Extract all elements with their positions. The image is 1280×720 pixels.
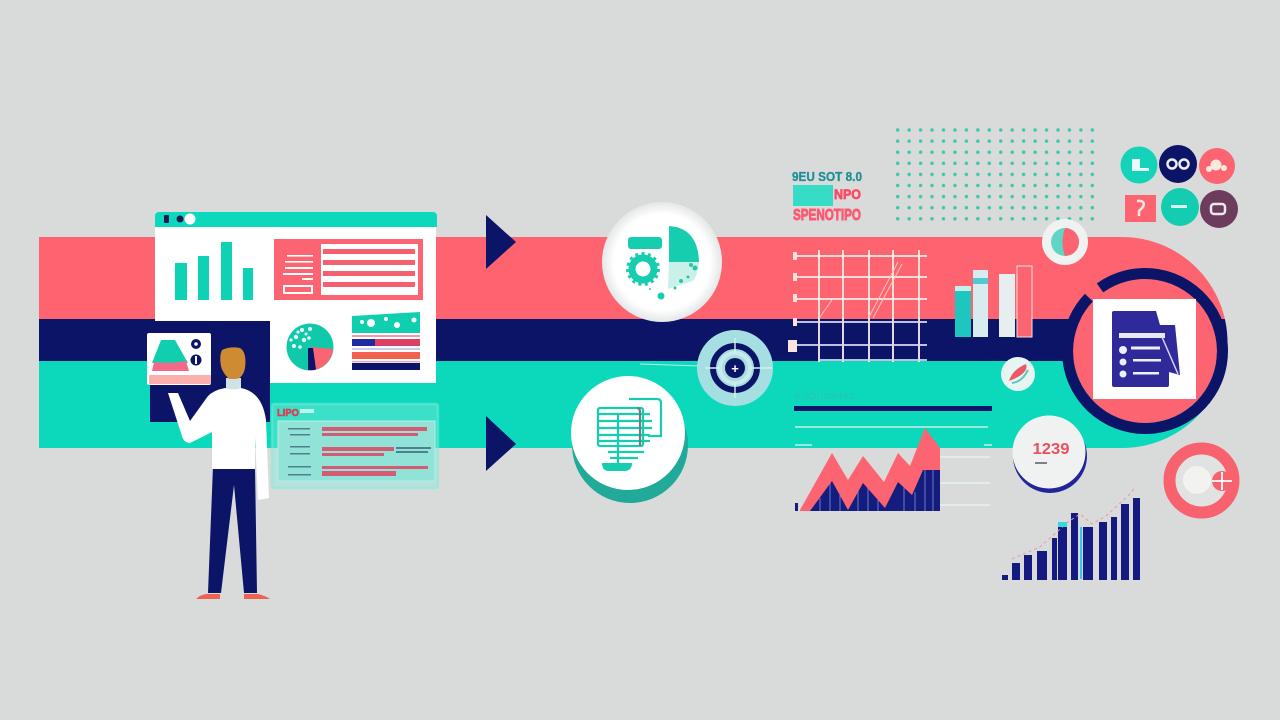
badge: navy xyxy=(1159,145,1197,183)
badge: red square xyxy=(1125,195,1156,222)
stat labels: NPO xyxy=(834,186,861,202)
icon: document stack badge xyxy=(571,376,688,503)
flow band: red, navy and teal stripes with rounded end xyxy=(39,237,1239,448)
neck xyxy=(226,378,241,390)
chart heading: A YOUGNTIO xyxy=(794,392,854,401)
line chart grid xyxy=(788,250,927,362)
stacked legend bars xyxy=(352,312,420,370)
icon: small donut badge xyxy=(1042,219,1088,265)
icon: gear and pie badge xyxy=(602,202,722,322)
axis labels xyxy=(788,252,797,352)
person viewing the dashboard xyxy=(168,347,270,599)
rising trend accents xyxy=(1012,489,1134,559)
bar chart: teal columns xyxy=(175,242,253,300)
trend lines xyxy=(820,262,902,318)
icon: numbered coin badge xyxy=(1012,416,1087,493)
focus ring with document xyxy=(1037,243,1253,459)
pie chart xyxy=(286,324,334,371)
tablet held by person xyxy=(147,333,211,385)
panel: dashboard window xyxy=(150,212,437,422)
trousers xyxy=(208,466,257,593)
icon group: six small badges xyxy=(1120,145,1238,228)
badge: teal xyxy=(1120,146,1158,184)
bar chart: four columns on band xyxy=(955,266,1032,337)
window title bar xyxy=(155,212,437,227)
small stat text block: SPENOTIPO xyxy=(793,207,861,224)
dot grid xyxy=(892,124,1098,224)
panel: floating translucent report xyxy=(272,404,438,488)
small stat text block xyxy=(792,169,862,224)
report heading: LIPO xyxy=(277,407,299,419)
area chart xyxy=(794,392,992,511)
icon: red target xyxy=(1170,448,1234,512)
arrow: lower flow xyxy=(486,416,516,471)
icon: target badge xyxy=(697,330,773,406)
icon: document xyxy=(1112,311,1180,387)
shoes xyxy=(196,594,270,599)
arrow: upper flow xyxy=(486,215,516,269)
bar chart: rising navy columns xyxy=(1002,489,1140,580)
connector line to target xyxy=(640,364,700,366)
stat heading: 9EU SOT 8.0 xyxy=(792,169,862,184)
report rows xyxy=(322,427,428,476)
red data table xyxy=(274,239,423,300)
navy area xyxy=(810,470,940,511)
red area xyxy=(800,428,940,511)
badge: plum xyxy=(1200,190,1238,228)
badge: red xyxy=(1199,148,1235,184)
document card xyxy=(1093,299,1196,399)
icon: numbered coin badge: 1239 xyxy=(1032,441,1070,458)
badge: teal minus xyxy=(1161,188,1199,226)
hair xyxy=(220,347,245,379)
shirt xyxy=(168,388,269,500)
icon: target badge: + xyxy=(731,361,739,376)
icon: small leaf badge xyxy=(1001,357,1035,391)
